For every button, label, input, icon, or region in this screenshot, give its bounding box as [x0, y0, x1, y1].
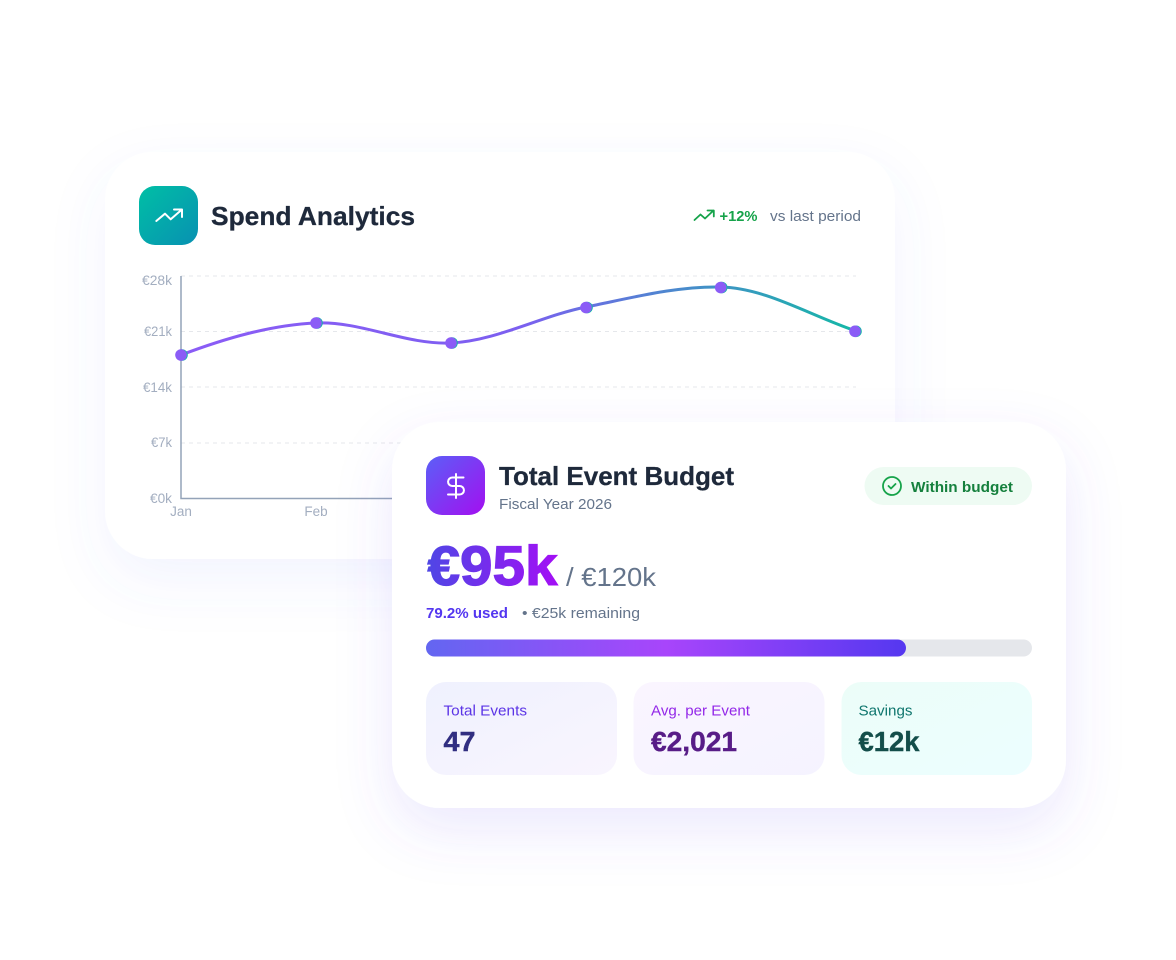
y axis labels: €7k [151, 435, 172, 450]
x axis labels [170, 504, 328, 519]
y axis labels: €14k [143, 380, 172, 395]
big number: spent of total [428, 534, 657, 597]
data points [175, 282, 862, 361]
subheading: fiscal year: Fiscal Year 2026 [499, 496, 612, 513]
stat tile: total events [426, 682, 617, 775]
x axis labels: Jan [170, 504, 192, 519]
line chart [142, 273, 862, 519]
stat tile: savings: €12k [858, 726, 920, 757]
stat tile: average per event [634, 682, 824, 775]
stat tile: total events: 47 [444, 726, 476, 757]
panel: spend analytics [105, 152, 895, 559]
progress bar [426, 640, 1032, 656]
heading: total event budget: Total Event Budget [499, 461, 734, 491]
y axis labels: €21k [144, 324, 172, 339]
trend indicator: vs last period [770, 208, 861, 225]
usage summary [426, 605, 640, 622]
usage summary: 79.2% used [426, 605, 508, 622]
trend indicator [694, 208, 861, 225]
icon: trending up on teal tile [139, 186, 198, 245]
panel: total event budget [392, 422, 1066, 808]
stat tile: savings [842, 682, 1032, 775]
status badge: within budget [864, 467, 1032, 505]
stat tile: average per event: €2,021 [651, 726, 737, 757]
big number: spent of total: / €120k [566, 562, 657, 592]
status badge: within budget: Within budget [911, 479, 1013, 496]
x axis labels: Feb [304, 504, 328, 519]
stat tile: savings: Savings [858, 702, 912, 720]
big number: spent of total: €95k [428, 534, 558, 597]
heading: spend analytics: Spend Analytics [211, 201, 415, 231]
usage summary: • €25k remaining [522, 605, 640, 622]
trend indicator: +12% [720, 208, 758, 225]
stat tile: total events: Total Events [444, 702, 527, 720]
spend line [181, 287, 856, 355]
y axis labels: €28k [142, 273, 172, 288]
icon: dollar sign on purple tile [426, 456, 485, 515]
stat tile: average per event: Avg. per Event [651, 702, 751, 720]
y axis labels: €0k [150, 491, 172, 506]
y axis labels [142, 273, 172, 506]
